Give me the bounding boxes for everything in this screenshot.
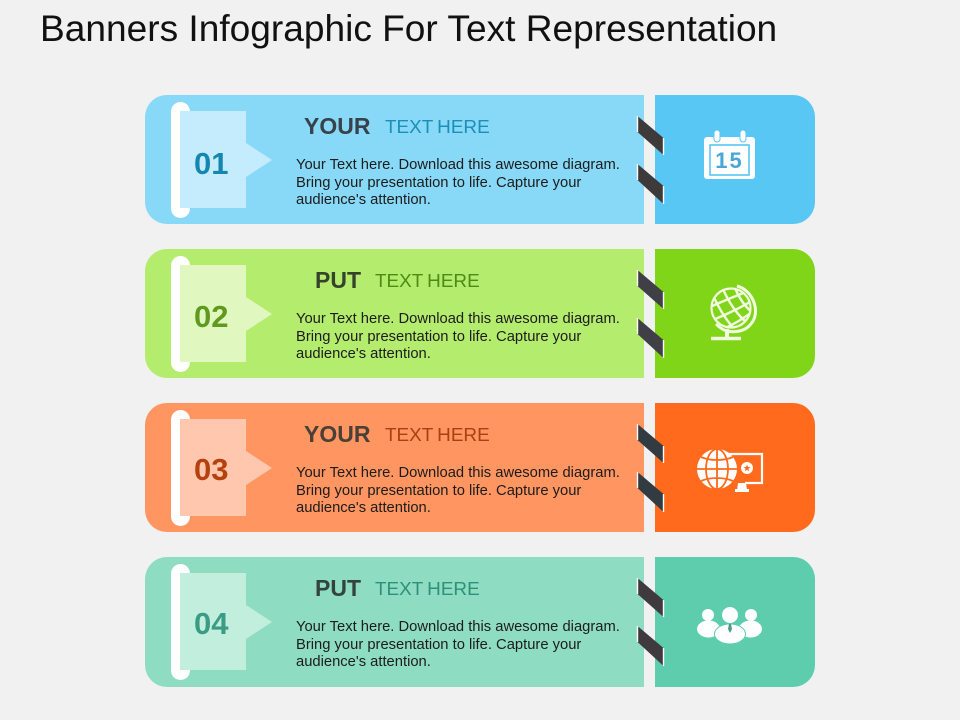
- banner 02 left body: [145, 249, 644, 378]
- banner 02 body text: Your Text here. Download this awesome diagram.: [296, 311, 620, 327]
- icon: team: [697, 607, 762, 644]
- banner 03 subheading: TEXT HERE: [385, 425, 490, 446]
- banner 01 body text: Your Text here. Download this awesome diagram.: [296, 157, 620, 173]
- banner 03 number tab: [180, 419, 272, 516]
- banner 04 body text: [296, 619, 620, 670]
- banner 03 left body: [145, 403, 644, 532]
- banner 02 number tab: [180, 265, 272, 362]
- banner 03 body text: Bring your presentation to life. Capture your: [296, 483, 581, 499]
- banner 03 body text: audience's attention.: [296, 500, 431, 516]
- banner 02 body text: Bring your presentation to life. Capture your: [296, 329, 581, 345]
- banner 04 number tab: [180, 573, 272, 670]
- banner 02 heading: PUT: [315, 267, 361, 293]
- banner 04 body text: Bring your presentation to life. Capture your: [296, 637, 581, 653]
- panel: banner 03: [145, 403, 815, 532]
- banner 01 body text: Bring your presentation to life. Capture your: [296, 175, 581, 191]
- banner 02 subheading: TEXT HERE: [375, 271, 480, 292]
- title: Banners Infographic For Text Representation: [40, 7, 777, 49]
- banner 02 right body: [655, 249, 815, 378]
- banner 01 left body: [145, 95, 644, 224]
- banner 04 body text: Your Text here. Download this awesome diagram.: [296, 619, 620, 635]
- banner 01 number tab: [180, 111, 272, 208]
- banner 01 straps: [638, 116, 664, 204]
- panel: banner 01: [145, 95, 815, 224]
- banner 04 number: 04: [194, 606, 229, 641]
- banner 04 body text: audience's attention.: [296, 654, 431, 670]
- banner 04 right body: [655, 557, 815, 687]
- banner 02 straps: [638, 270, 664, 358]
- banner 01 white bracket: [171, 102, 190, 218]
- banner 04 white bracket: [171, 564, 190, 680]
- banner 01 body text: audience's attention.: [296, 192, 431, 208]
- banner 02 white bracket: [171, 256, 190, 372]
- banner 03 body text: [296, 465, 620, 516]
- banner 01 body text: [296, 157, 620, 208]
- banner 03 right body: [655, 403, 815, 532]
- banner 03 white bracket: [171, 410, 190, 526]
- banner 04 left body: [145, 557, 644, 687]
- icon: calendar: [704, 130, 755, 179]
- banner 02 body text: [296, 311, 620, 362]
- banner 01 subheading: TEXT HERE: [385, 117, 490, 138]
- banner 04 straps: [638, 578, 664, 666]
- banner 01 right body: [655, 95, 815, 224]
- banner 01 heading: YOUR: [304, 113, 371, 139]
- banner 03 number: 03: [194, 452, 228, 487]
- banner 04 subheading: TEXT HERE: [375, 579, 480, 600]
- banner 02 body text: audience's attention.: [296, 346, 431, 362]
- banner 02 number: 02: [194, 299, 228, 334]
- panel: banner 02: [145, 249, 815, 378]
- banner 01 number: 01: [194, 146, 228, 181]
- banner 03 straps: [638, 424, 664, 512]
- icon: globe: [710, 284, 757, 340]
- icon: calendar: 15: [715, 148, 744, 173]
- banner 03 body text: Your Text here. Download this awesome diagram.: [296, 465, 620, 481]
- panel: banner 04: [145, 557, 815, 687]
- icon: globe and monitor: [697, 449, 762, 492]
- banner 04 heading: PUT: [315, 575, 361, 601]
- banner 03 heading: YOUR: [304, 421, 371, 447]
